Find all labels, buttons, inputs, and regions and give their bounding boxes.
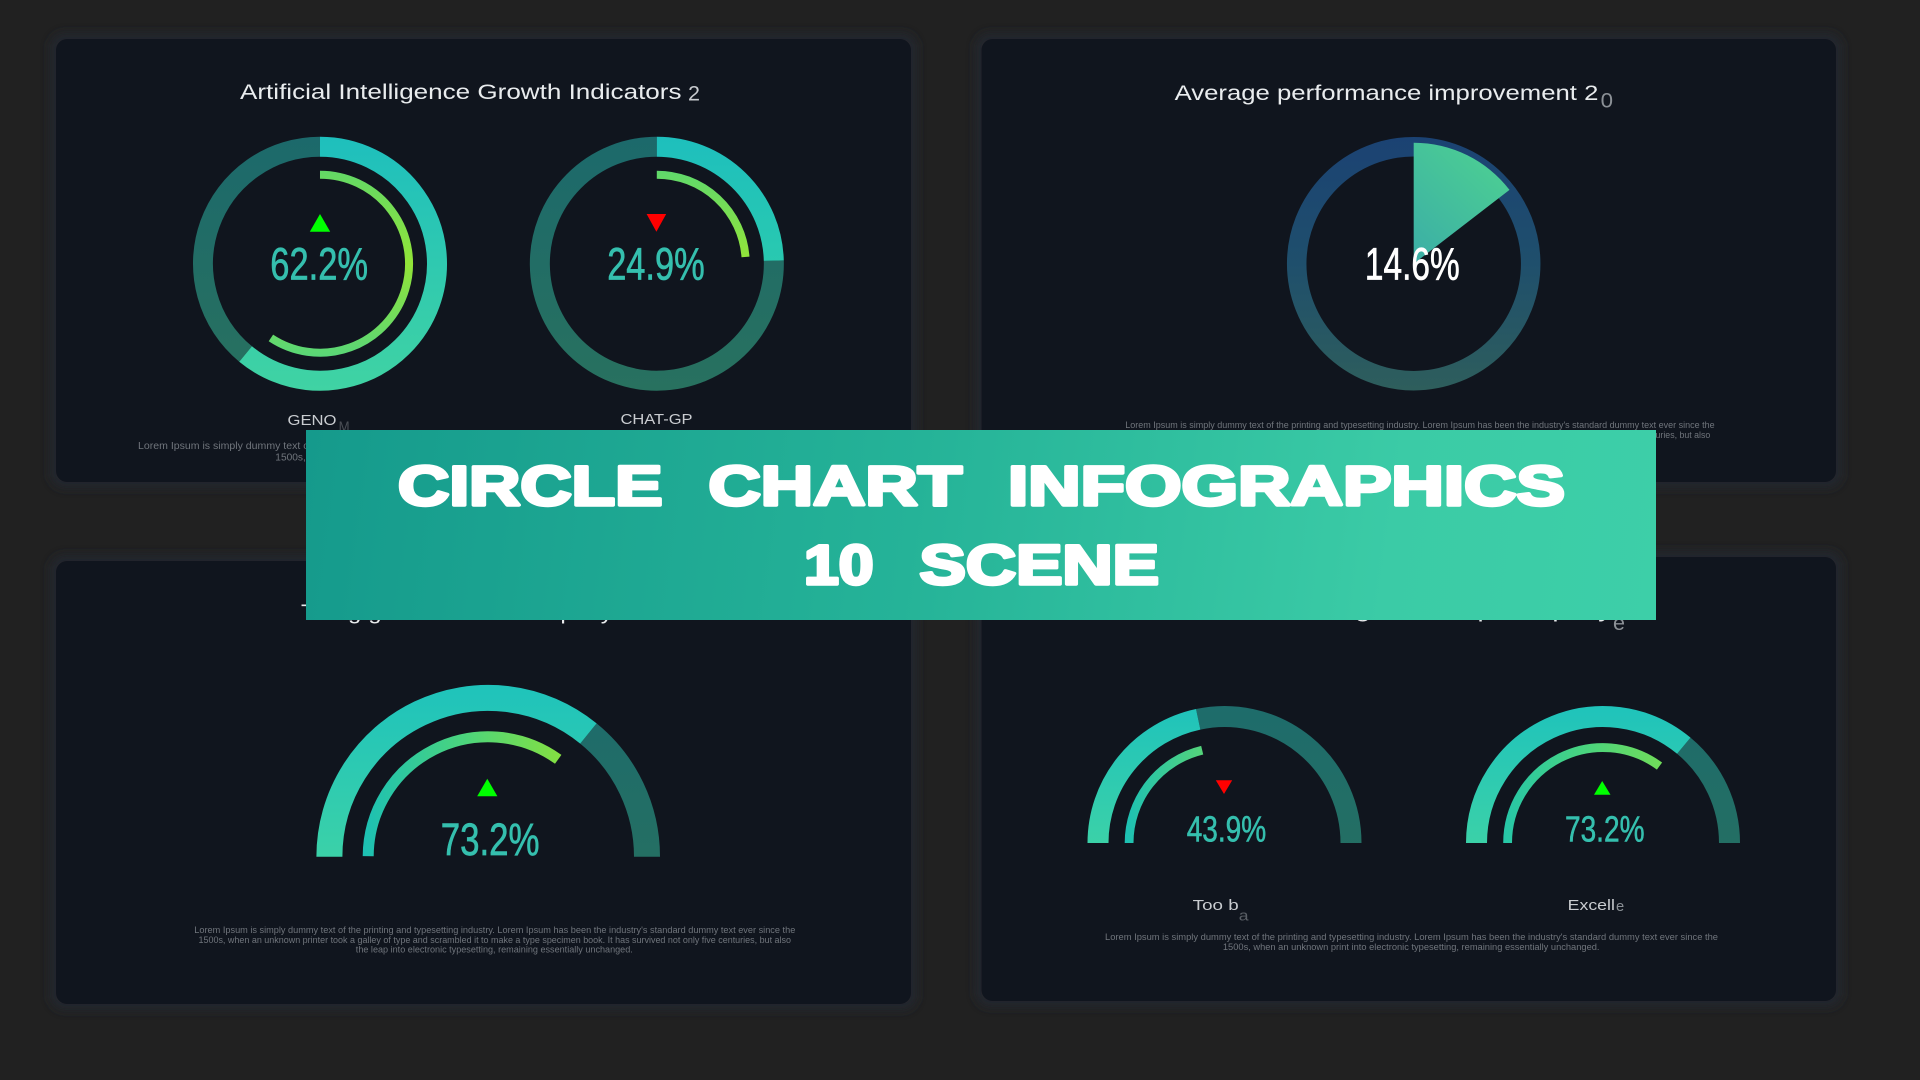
banner heading line 2: 10 xyxy=(804,533,874,596)
description text xyxy=(1105,932,1718,952)
panel: company growth gauge xyxy=(56,561,911,1004)
description text xyxy=(1125,420,1715,440)
description text: 1500s, when an unknown printer took a galley of type and scrambled it to make a type specimen book. It has survived not only five centuries, but also xyxy=(198,935,791,945)
gauge chart: excellent 73.2% xyxy=(1476,717,1730,843)
description text xyxy=(194,925,795,955)
donut chart: 14.6% xyxy=(1297,147,1531,381)
label: excellent xyxy=(1568,898,1624,915)
banner heading line 2: SCENE xyxy=(920,533,1159,596)
label: GENO: M xyxy=(339,420,350,436)
value: 73.2%: 73.2% xyxy=(1565,809,1644,850)
gauge chart: too bad 43.9% xyxy=(1098,717,1351,843)
banner heading line 1: INFOGRAPHICS xyxy=(1008,454,1565,517)
banner heading line 1: CHART xyxy=(708,454,962,517)
label: too bad: a xyxy=(1239,909,1250,925)
title: artificial intelligence growth indicators: 2 xyxy=(688,82,700,106)
title: average performance improvement xyxy=(1175,82,1613,113)
gauge chart: 73.2% xyxy=(329,698,647,857)
icon: red down triangle xyxy=(647,214,666,232)
label: CHAT-GP: CHAT-GP xyxy=(620,412,692,428)
title: artificial intelligence growth indicators: Artificial Intelligence Growth Indicators xyxy=(240,81,682,104)
title: average performance improvement: 0 xyxy=(1601,90,1613,113)
value: 14.6%: 14.6% xyxy=(1365,238,1460,289)
description text: 1500s, when an unknown print into electronic typesetting, remaining essentially unchanged. xyxy=(1223,942,1600,952)
description text: Lorem Ipsum is simply dummy text of the printing and typesetting industry. Lorem Ipsum has been the industry's standard dummy text ever since the xyxy=(1105,932,1718,942)
pie sector xyxy=(1414,143,1510,264)
description text: Lorem Ipsum is simply dummy text of the printing and typesetting industry. Lorem Ipsum has been the industry's standard dummy text ever since the xyxy=(1125,420,1715,430)
label: too bad xyxy=(1193,898,1250,925)
label: excellent: e xyxy=(1616,899,1624,915)
label: GENO xyxy=(288,413,350,436)
description text: 1500s, when an unknown printer took a galley of type and scrambled xyxy=(275,453,585,464)
title: ratings: e xyxy=(1613,612,1625,635)
donut chart: GENO 62.2% xyxy=(203,147,437,381)
value: 43.9%: 43.9% xyxy=(1187,809,1266,850)
title: average performance improvement: Average performance improvement 2 xyxy=(1175,82,1598,105)
title banner xyxy=(306,430,1656,620)
value: 73.2%: 73.2% xyxy=(441,814,540,865)
description text xyxy=(138,441,829,464)
label: too bad: Too b xyxy=(1193,898,1239,914)
banner heading line 1: CIRCLE xyxy=(398,454,662,517)
donut chart: CHAT-GP 24.9% xyxy=(540,147,774,381)
description text: 1500s, when an unknown printer took a galley of type and scrambled it to make a type specimen book. It has survived not only five centuries, but also xyxy=(1129,430,1710,440)
value: 24.9%: 24.9% xyxy=(607,238,705,289)
title: ratings: Customer rating of the top company xyxy=(1175,599,1613,622)
value: 62.2%: 62.2% xyxy=(270,238,368,289)
title: company growth: Thing growth of the company 20 xyxy=(301,601,646,624)
label: GENO: GENO xyxy=(288,413,336,429)
description text: Lorem Ipsum is simply dummy text of the printing and typesetting industry. Lorem Ipsum has been the industry's standard dummy text ever since the xyxy=(194,925,795,935)
label: excellent: Excell xyxy=(1568,898,1615,914)
banner heading line 2 xyxy=(804,533,1159,596)
icon: red down triangle xyxy=(1216,780,1232,794)
panel: average performance improvement xyxy=(982,39,1836,482)
title: ratings xyxy=(1175,599,1625,635)
icon: green up triangle xyxy=(1594,781,1610,795)
icon: green up triangle xyxy=(310,214,330,232)
description text: the leap into electronic typesetting, remaining essentially unchanged. xyxy=(356,945,633,955)
panel: rating gauges xyxy=(982,557,1836,1001)
icon: green up triangle xyxy=(477,779,497,796)
description text: Lorem Ipsum is simply dummy text of the printing and typesetting industry. Lorem Ipsum has been the industry's standard dummy text ever since the xyxy=(138,441,829,452)
panel: AI growth indicators xyxy=(56,39,911,482)
banner heading line 1 xyxy=(398,454,1565,517)
